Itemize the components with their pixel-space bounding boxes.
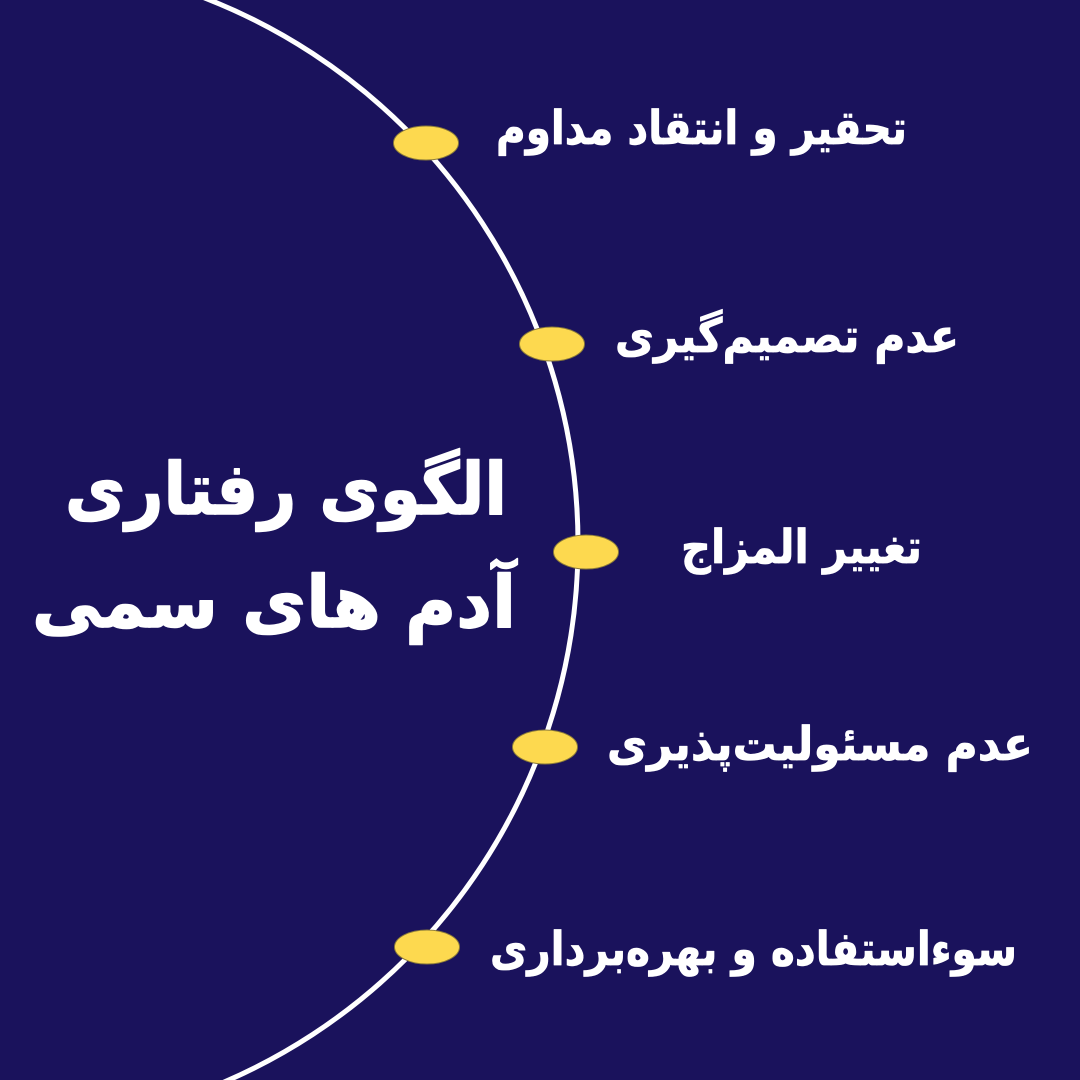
marker 1 <box>394 126 458 160</box>
marker 4 <box>512 730 578 764</box>
item 2: indecision: عدم تصمیم‌گیری <box>615 309 959 364</box>
marker 5 <box>394 930 460 964</box>
item 3: mood swings <box>554 520 922 575</box>
marker 3 <box>554 535 618 569</box>
item 4: irresponsibility: عدم مسئولیت‌پذیری <box>607 717 1033 772</box>
marker 2 <box>520 327 584 361</box>
title: الگوی رفتاری <box>65 447 507 532</box>
curved timeline arc <box>0 0 578 1080</box>
title <box>32 447 518 644</box>
title: آدم های سمی <box>32 558 518 644</box>
item 1: constant contempt and criticism: تحقیر و انتقاد مداوم <box>496 101 907 156</box>
item 1: constant contempt and criticism <box>394 101 907 160</box>
item 3: mood swings: تغییر المزاج <box>681 520 922 575</box>
